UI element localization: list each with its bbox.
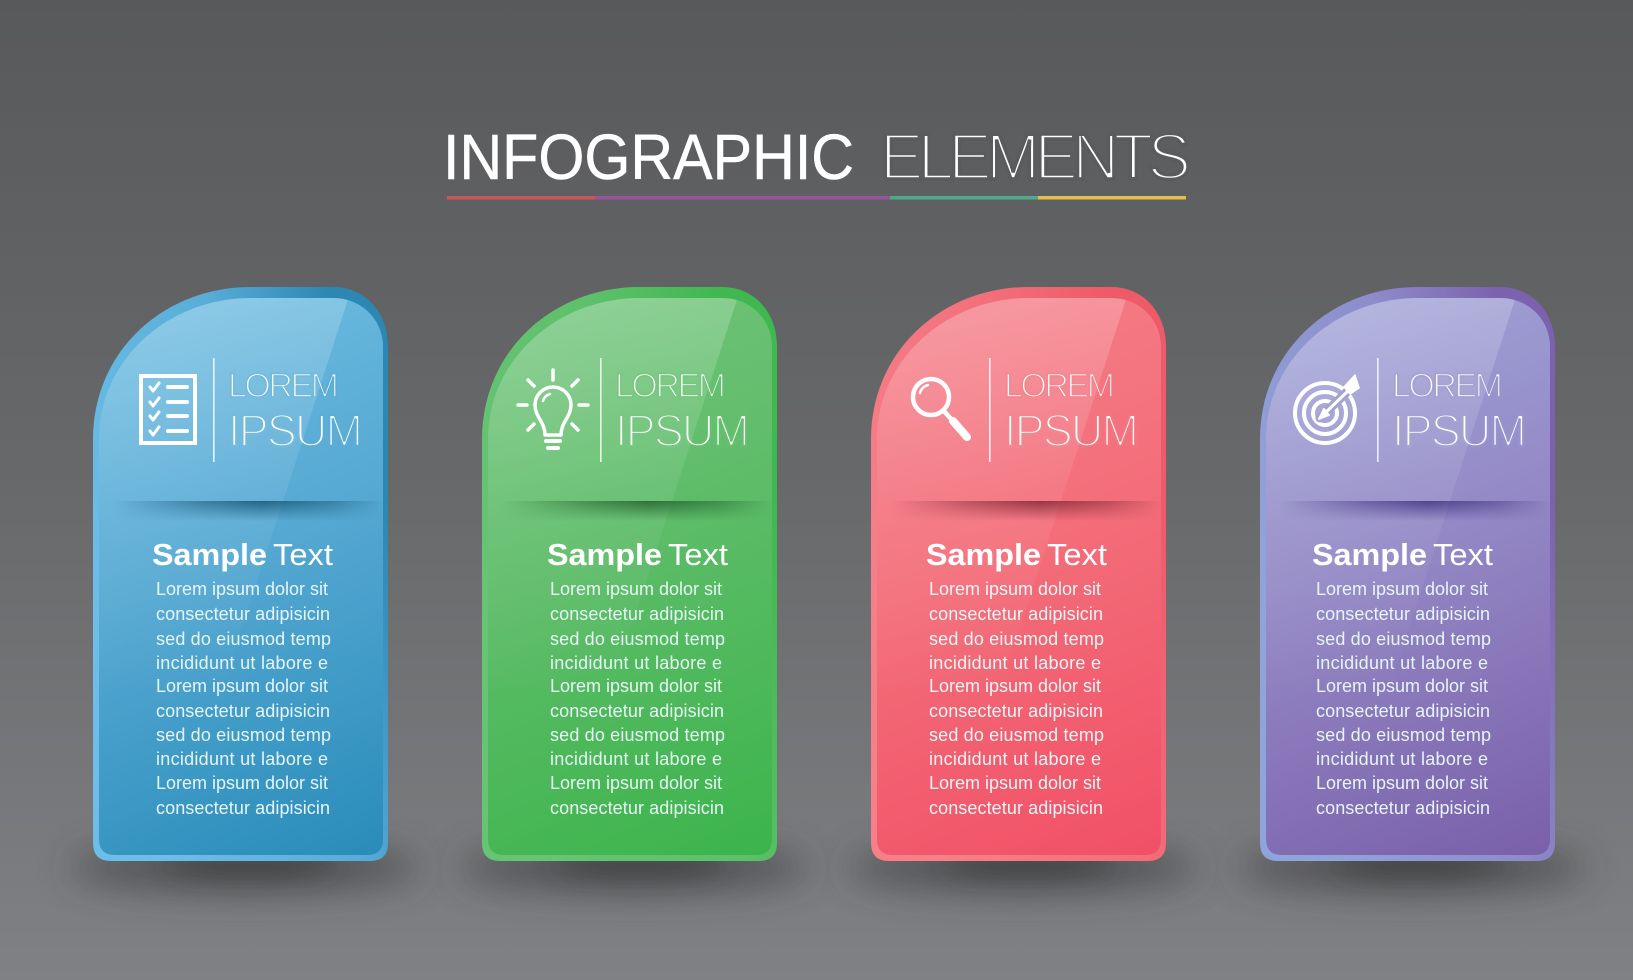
heading: lorem ipsum: LOREM [1004, 367, 1115, 405]
sample text heading: Sample [547, 537, 662, 572]
body text: incididunt ut labore e [929, 653, 1101, 673]
panel: red card [871, 287, 1166, 861]
body text: Lorem ipsum dolor sit [929, 579, 1101, 599]
body text: Lorem ipsum dolor sit [1316, 579, 1488, 599]
body text: sed do eiusmod temp [929, 629, 1104, 649]
title underline [447, 196, 1186, 200]
heading: lorem ipsum: IPSUM [615, 405, 750, 456]
body text: consectetur adipisicin [156, 798, 330, 818]
heading: lorem ipsum [1004, 367, 1139, 456]
body text: consectetur adipisicin [550, 798, 724, 818]
heading: lorem ipsum: LOREM [615, 367, 726, 405]
body text: incididunt ut labore e [156, 749, 328, 769]
icon: light bulb [518, 370, 588, 448]
body text: consectetur adipisicin [156, 701, 330, 721]
body text [550, 579, 725, 818]
body text: incididunt ut labore e [1316, 749, 1488, 769]
sample text heading: Sample [926, 537, 1041, 572]
body text: consectetur adipisicin [1316, 798, 1490, 818]
body text: consectetur adipisicin [929, 604, 1103, 624]
body text: incididunt ut labore e [550, 749, 722, 769]
vertical divider [1377, 358, 1379, 462]
sample text heading: Text [1047, 537, 1107, 572]
heading: lorem ipsum: IPSUM [1004, 405, 1139, 456]
body text: Lorem ipsum dolor sit [550, 676, 722, 696]
heading: lorem ipsum [615, 367, 750, 456]
sample text heading [926, 537, 1107, 572]
sample text heading: Text [273, 537, 333, 572]
body text: Lorem ipsum dolor sit [1316, 676, 1488, 696]
body text: Lorem ipsum dolor sit [550, 773, 722, 793]
body text [1316, 579, 1491, 818]
sample text heading: Sample [152, 537, 267, 572]
body text: incididunt ut labore e [1316, 653, 1488, 673]
body text: sed do eiusmod temp [550, 629, 725, 649]
panel: blue card [93, 287, 388, 861]
sample text heading: Text [668, 537, 728, 572]
body text: sed do eiusmod temp [550, 725, 725, 745]
body text: Lorem ipsum dolor sit [929, 676, 1101, 696]
heading: lorem ipsum: IPSUM [1392, 405, 1527, 456]
title: INFOGRAPHIC [443, 121, 854, 193]
heading: lorem ipsum: LOREM [228, 367, 339, 405]
vertical divider [600, 358, 602, 462]
sample text heading: Text [1433, 537, 1493, 572]
icon: checklist [141, 376, 195, 443]
body text: Lorem ipsum dolor sit [156, 579, 328, 599]
vertical divider [213, 358, 215, 462]
body text [156, 579, 331, 818]
heading: lorem ipsum [228, 367, 363, 456]
body text: consectetur adipisicin [929, 701, 1103, 721]
sample text heading [547, 537, 728, 572]
body text: Lorem ipsum dolor sit [550, 579, 722, 599]
body text: consectetur adipisicin [929, 798, 1103, 818]
vertical divider [989, 358, 991, 462]
title [443, 120, 1191, 193]
body text: sed do eiusmod temp [1316, 725, 1491, 745]
panel: green card [482, 287, 777, 861]
body text: consectetur adipisicin [1316, 701, 1490, 721]
body text: sed do eiusmod temp [929, 725, 1104, 745]
body text: Lorem ipsum dolor sit [156, 676, 328, 696]
panel: purple card [1260, 287, 1555, 861]
title: ELEMENTS [880, 120, 1191, 193]
body text: sed do eiusmod temp [156, 725, 331, 745]
body text [929, 579, 1104, 818]
sample text heading [1312, 537, 1493, 572]
body text: Lorem ipsum dolor sit [929, 773, 1101, 793]
body text: sed do eiusmod temp [1316, 629, 1491, 649]
card shadows [70, 844, 1587, 892]
icon: magnifier [913, 379, 967, 437]
sample text heading: Sample [1312, 537, 1427, 572]
body text: incididunt ut labore e [929, 749, 1101, 769]
heading: lorem ipsum: IPSUM [228, 405, 363, 456]
body text: consectetur adipisicin [550, 604, 724, 624]
heading: lorem ipsum: LOREM [1392, 367, 1503, 405]
body text: incididunt ut labore e [156, 653, 328, 673]
body text: consectetur adipisicin [1316, 604, 1490, 624]
body text: incididunt ut labore e [550, 653, 722, 673]
heading: lorem ipsum [1392, 367, 1527, 456]
body text: sed do eiusmod temp [156, 629, 331, 649]
body text: consectetur adipisicin [156, 604, 330, 624]
body text: Lorem ipsum dolor sit [1316, 773, 1488, 793]
sample text heading [152, 537, 333, 572]
body text: Lorem ipsum dolor sit [156, 773, 328, 793]
body text: consectetur adipisicin [550, 701, 724, 721]
icon: target with dart [1295, 375, 1359, 443]
